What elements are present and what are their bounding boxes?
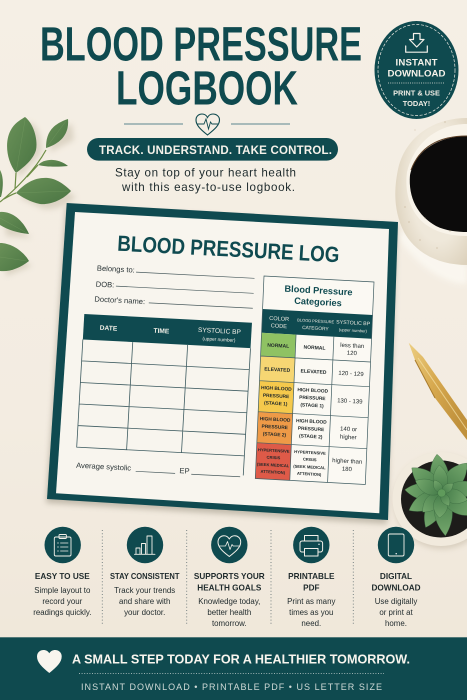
text block: record your [42, 597, 83, 606]
footer headline: A SMALL STEP TODAY FOR A HEALTHIER TOMORROW. [72, 653, 410, 667]
table rows: HIGH BLOOD [261, 385, 292, 393]
text block [194, 572, 265, 628]
table rows: ELEVATED [300, 369, 327, 376]
text block: Print as many [287, 597, 335, 606]
badge: instant download [374, 21, 458, 119]
table header: CATEGORY [302, 325, 330, 332]
table rows: 120 [347, 351, 358, 357]
average line: Average systolic [76, 461, 132, 473]
feature: stay consistent [110, 527, 180, 617]
table header: SYSTOLIC BP [336, 320, 371, 327]
intro text [115, 166, 296, 194]
icon: printer [293, 527, 329, 563]
table header: CODE [271, 323, 287, 330]
table rows: HIGH BLOOD [296, 418, 327, 426]
table header: COLOR [269, 316, 289, 323]
badge: instant download: INSTANT [396, 57, 438, 68]
text block: EASY TO USE [35, 572, 90, 581]
table rows: (STAGE 1) [264, 400, 288, 408]
table rows: 180 [342, 467, 353, 473]
tagline pill: TRACK. UNDERSTAND. TAKE CONTROL. [99, 145, 332, 157]
table rows: CRISIS [267, 455, 281, 460]
text block: Knowledge today, [198, 597, 260, 606]
average line [76, 461, 241, 478]
table rows [257, 339, 367, 479]
log form [75, 229, 340, 483]
table rows: HYPERTENSIVE [294, 449, 326, 456]
table rows: HYPERTENSIVE [258, 447, 290, 454]
table rows: ATTENTION) [260, 469, 286, 475]
table rows: higher than [332, 458, 362, 466]
feature dividers [102, 530, 353, 626]
log table: DATE [100, 325, 118, 333]
text block: HEALTH GOALS [197, 584, 262, 592]
feature: digital download [371, 527, 421, 628]
log table [76, 314, 252, 475]
icon: clipboard [44, 527, 81, 563]
table header [262, 309, 373, 339]
colour cells [255, 333, 296, 480]
coffee cup [395, 118, 467, 284]
text block: tomorrow. [212, 619, 247, 628]
table rows: (SEEK MEDICAL [293, 464, 326, 470]
text block: DOWNLOAD [371, 584, 421, 592]
table rows: higher [340, 435, 357, 441]
icon: heart [37, 650, 62, 673]
table rows: CRISIS [303, 457, 317, 462]
text block: SUPPORTS YOUR [194, 572, 265, 581]
gold pen [409, 343, 467, 440]
text block: Use digitally [375, 597, 417, 606]
table heading [284, 284, 353, 309]
succulent plant [392, 452, 467, 549]
table rows: 130 - 139 [337, 398, 363, 406]
icon: tablet [378, 527, 414, 563]
table heading: Blood Pressure [284, 284, 353, 297]
text block: and share with [119, 597, 170, 606]
badge: instant download: TODAY! [403, 99, 430, 108]
table rows: NORMAL [267, 343, 289, 350]
text block: DIGITAL [380, 572, 412, 581]
badge: instant download: PRINT & USE [393, 88, 440, 98]
log table: (upper number) [202, 336, 236, 344]
text block: better health [207, 608, 251, 617]
text block: PRINTABLE [288, 572, 335, 581]
tagline pill [87, 138, 338, 161]
footer details: INSTANT DOWNLOAD • PRINTABLE PDF • US LETTER SIZE [81, 682, 382, 692]
table rows: PRESSURE [298, 426, 325, 433]
log table: TIME [153, 328, 170, 335]
table rows: less than [340, 343, 364, 350]
panel: logbook sheet [46, 203, 398, 524]
sheet title: BLOOD PRESSURE LOG [117, 231, 340, 267]
form fields: Doctor's name: [94, 295, 145, 306]
table rows: HIGH BLOOD [297, 387, 329, 395]
table rows: PRESSURE [299, 395, 326, 402]
form fields: Belongs to: [97, 264, 135, 275]
icon: bar chart [127, 527, 163, 563]
average line: EP [179, 466, 190, 476]
text block: times as you [289, 608, 333, 617]
intro text: Stay on top of your heart health [115, 166, 296, 179]
table rows: PRESSURE [263, 393, 290, 400]
badge: instant download: DOWNLOAD [388, 68, 446, 80]
intro text: with this easy-to-use logbook. [121, 181, 295, 194]
table rows: (STAGE 2) [299, 433, 323, 441]
feature: printable pdf [287, 527, 335, 628]
text block: Simple layout to [34, 586, 91, 595]
table heading: Categories [294, 296, 342, 308]
title [40, 18, 362, 116]
table rows: (STAGE 2) [263, 431, 287, 439]
feature: supports your health goals [194, 527, 265, 628]
text block: or print at [379, 608, 413, 617]
text block [110, 572, 180, 617]
plant branch with leaves [0, 117, 76, 276]
text block: Track your trends [114, 586, 175, 595]
text block: STAY CONSISTENT [110, 572, 180, 581]
title: LOGBOOK [116, 62, 298, 116]
table rows: (SEEK MEDICAL [257, 462, 290, 468]
table header: (upper number) [339, 327, 368, 334]
heart divider [124, 114, 290, 135]
table rows: 140 or [340, 427, 357, 433]
feature: easy to use [33, 527, 91, 617]
text block: home. [385, 619, 407, 628]
table rows: ELEVATED [264, 367, 291, 374]
table rows: (STAGE 1) [300, 402, 324, 410]
form fields: DOB: [96, 280, 115, 290]
table rows: HIGH BLOOD [260, 416, 291, 424]
table rows: NORMAL [303, 345, 326, 352]
text block: your doctor. [124, 608, 165, 617]
footer banner [0, 637, 467, 700]
text block: readings quickly. [33, 608, 91, 617]
form fields [94, 264, 255, 312]
table rows: PRESSURE [261, 424, 289, 431]
icon: heart pulse [211, 527, 248, 563]
table rows: ATTENTION) [297, 471, 322, 477]
text block: PDF [303, 584, 319, 592]
category table [255, 276, 374, 484]
text block [33, 572, 91, 617]
table rows: 120 - 129 [338, 371, 364, 378]
text block: need. [301, 619, 321, 628]
log table: SYSTOLIC BP [198, 327, 242, 336]
text block [371, 572, 421, 628]
table header: BLOOD PRESSURE [297, 317, 335, 324]
text block [287, 572, 335, 628]
